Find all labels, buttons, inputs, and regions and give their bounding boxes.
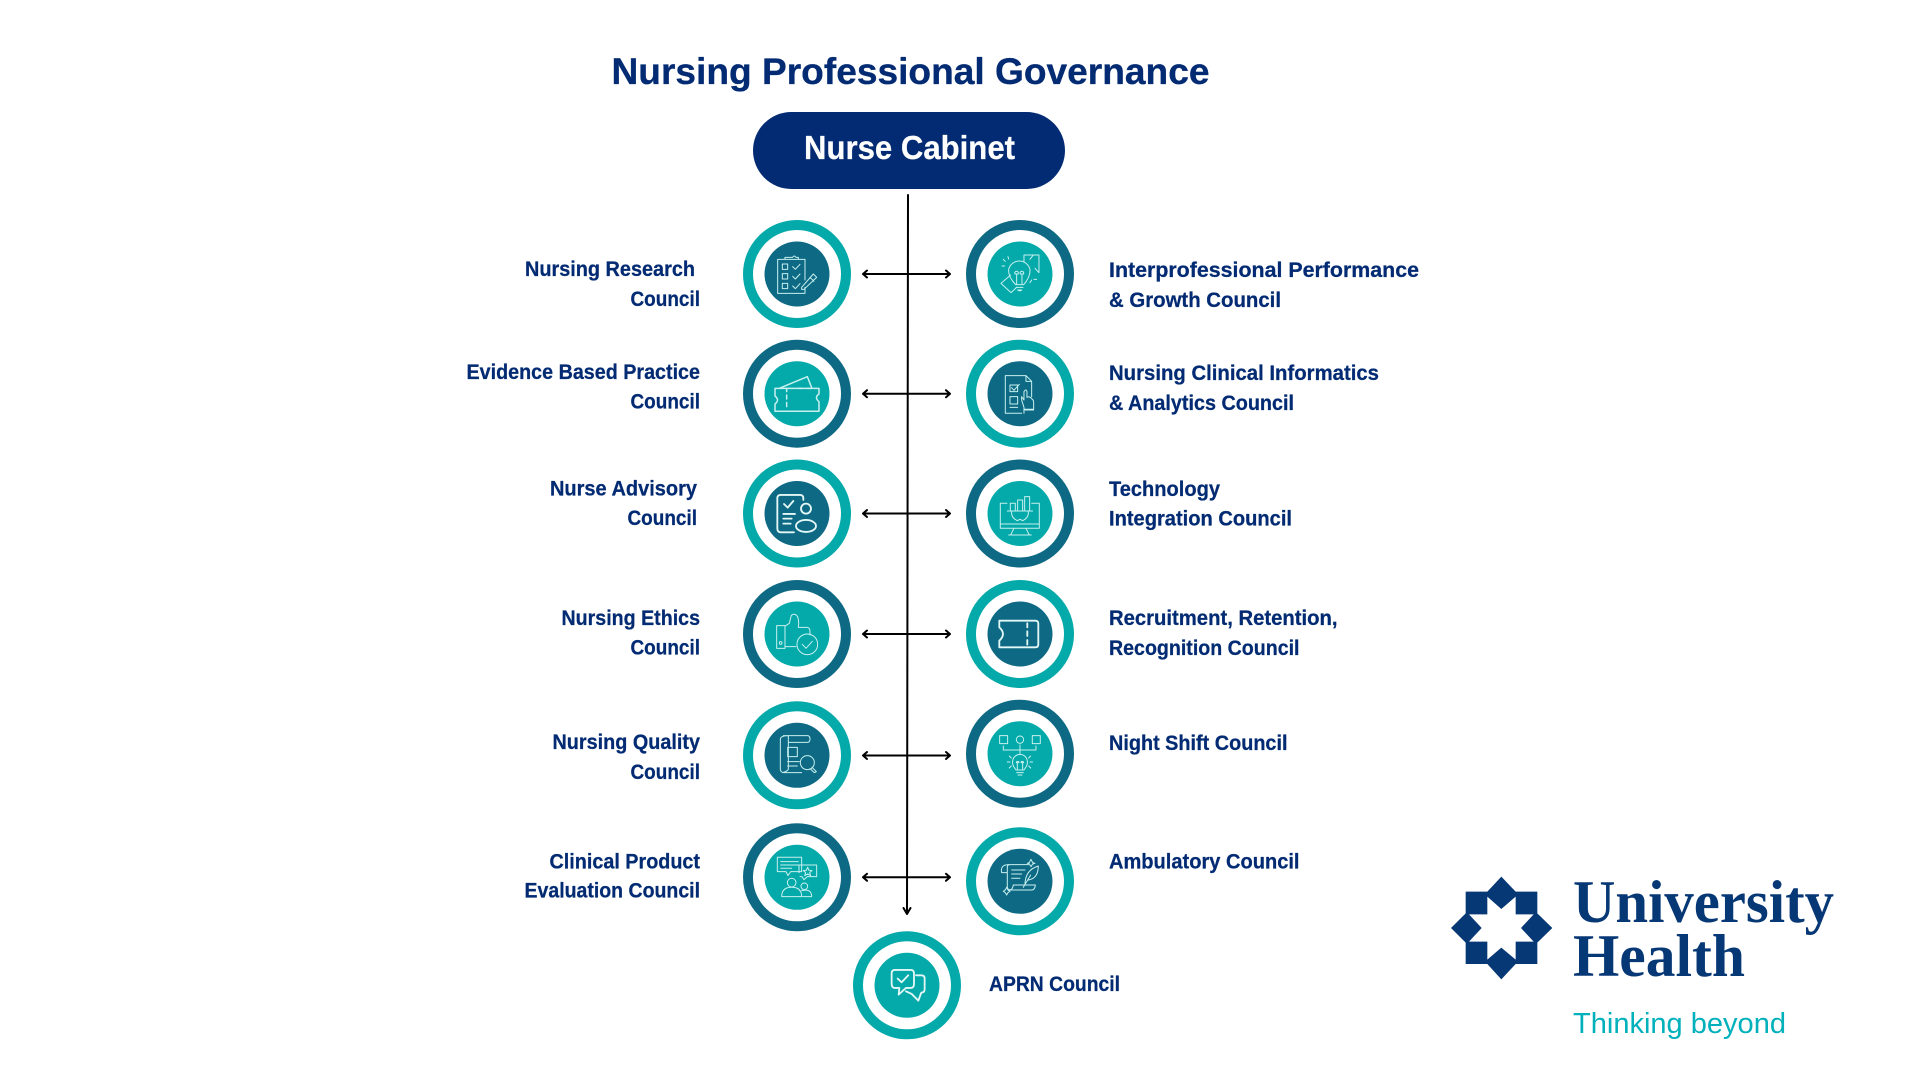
icon: tickets [775, 377, 819, 411]
label: Technology Integration Council: Integration Council [1109, 508, 1292, 531]
council: Nurse Advisory [748, 464, 846, 562]
label: Clinical Product Evaluation Council: Clinical Product [550, 850, 700, 873]
council: Nursing Quality [748, 706, 846, 804]
icon: light bulb with arrow [1001, 255, 1039, 293]
icon: form with person [777, 495, 816, 532]
label: Nursing Quality Council [552, 731, 700, 784]
label: Nursing Research Council: Council [630, 288, 700, 311]
label: Technology Integration Council [1109, 478, 1292, 531]
label: Evidence Based Practice Council: Evidence Based Practice [466, 361, 700, 384]
label: Technology Integration Council: Technology [1109, 478, 1220, 501]
icon: workflow with light bulb [1000, 736, 1040, 775]
icon: document with pointing hand [1005, 376, 1034, 413]
council: Ambulatory [971, 832, 1069, 930]
label: Ambulatory Council: Ambulatory Council [1109, 850, 1300, 873]
label: Night Shift Council: Night Shift Council [1109, 732, 1288, 755]
label: Nursing Clinical Informatics and Analytics Council [1109, 362, 1379, 415]
label: Nurse Advisory Council: Council [628, 507, 697, 530]
council: Nursing Clinical Informatics [971, 345, 1069, 443]
label: APRN Council: APRN Council [989, 973, 1120, 996]
icon: thumbs up with check [777, 614, 818, 655]
council: Recruitment, Retention, Recognition [971, 585, 1069, 683]
label: Nursing Quality Council: Nursing Quality [552, 731, 700, 754]
header pill: Nurse Cabinet [753, 112, 1065, 189]
label: Clinical Product Evaluation Council [524, 850, 700, 903]
label: Recruitment, Retention, Recognition Council: Recognition Council [1109, 637, 1300, 660]
icon: feedback bubbles and people [777, 857, 817, 897]
label: Nursing Quality Council: Council [630, 761, 700, 784]
label: Nurse Advisory Council: Nurse Advisory [550, 477, 697, 500]
label: Interprofessional Performance and Growth Council: Interprofessional Performance [1109, 259, 1419, 282]
logo: University Health: Health [1573, 923, 1745, 989]
council: Nursing Research [748, 225, 846, 323]
label: Recruitment, Retention, Recognition Council: Recruitment, Retention, [1109, 607, 1338, 630]
label: Nursing Ethics Council: Nursing Ethics [562, 607, 700, 630]
label: Recruitment, Retention, Recognition Council [1109, 607, 1338, 660]
label: Nurse Advisory Council [550, 477, 697, 530]
council: Clinical Product Evaluation [748, 828, 846, 926]
label: Nursing Research Council [525, 258, 700, 311]
icon: scroll and quill [1001, 859, 1038, 895]
label: Clinical Product Evaluation Council: Evaluation Council [524, 880, 700, 903]
logo: University Health [1451, 869, 1834, 1040]
label: Nursing Ethics Council [562, 607, 700, 659]
icon: speech bubbles with check [892, 970, 925, 1001]
label: Interprofessional Performance and Growth Council [1109, 259, 1419, 312]
icon: report with magnifier [780, 736, 816, 773]
label: Interprofessional Performance and Growth Council: & Growth Council [1109, 289, 1281, 312]
logo: University Health: University [1573, 869, 1834, 935]
label: Nursing Clinical Informatics and Analytics Council: Nursing Clinical Informatics [1109, 362, 1379, 385]
council: Interprofessional Performance [971, 225, 1069, 323]
council: Technology Integration [971, 464, 1069, 562]
label: Nursing Ethics Council: Council [630, 636, 700, 659]
vertical connector arrow [904, 195, 910, 914]
council: Night Shift [971, 705, 1069, 803]
logo: University Health: Thinking beyond [1573, 1008, 1786, 1040]
council: Evidence Based Practice [748, 345, 846, 443]
label: Nursing Research Council: Nursing Research [525, 258, 695, 281]
council: APRN [858, 936, 956, 1034]
header pill: Nurse Cabinet: Nurse Cabinet [804, 130, 1015, 167]
horizontal double arrows [863, 270, 950, 881]
label: Nursing Clinical Informatics and Analytics Council: & Analytics Council [1109, 392, 1294, 415]
icon: clipboard checklist [778, 256, 817, 293]
icon: monitor with bar chart and gear [1000, 497, 1039, 535]
icon: ticket [999, 621, 1038, 647]
title: Nursing Professional Governance [612, 51, 1210, 92]
label: Evidence Based Practice Council: Council [630, 391, 700, 414]
label: Evidence Based Practice Council [466, 361, 700, 414]
icon: eight-point star [1451, 877, 1552, 979]
council: Nursing Ethics [748, 585, 846, 683]
